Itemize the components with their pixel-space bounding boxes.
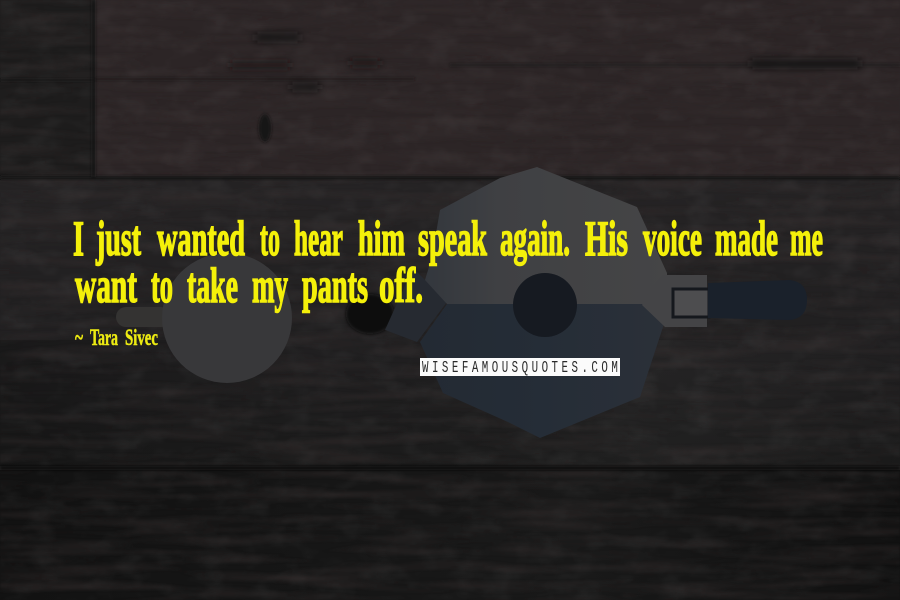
coffee mug [116,253,292,383]
author attribution [75,325,158,350]
quote text: voice [643,210,702,266]
quote text: wanted [157,210,245,266]
mug handle [116,307,171,327]
quote text: His [585,210,628,266]
author attribution: Tara [90,325,118,350]
moka pot [346,167,807,438]
pot body upper half [425,167,667,304]
watermark badge: WISEFAMOUSQUOTES.COM [422,359,618,378]
pot body lower half [420,304,667,438]
quote text: want [75,257,137,313]
quote text: him [358,210,405,266]
quote text: my [252,257,288,313]
quote text: just [95,210,141,266]
quote text: made [715,210,778,266]
pot handle bracket [642,275,707,327]
quote text: hear [294,210,343,266]
pot handle grip [673,289,709,317]
quote text: me [790,210,823,266]
quote text [73,210,823,313]
pot lid knob [513,273,577,337]
quote text: pants [302,257,368,313]
quote text: take [187,257,238,313]
quote text: off. [379,257,423,313]
pot black handle [708,280,807,320]
author attribution: ~ [75,325,83,350]
quote text: to [151,257,173,313]
quote text: I [73,210,84,266]
author attribution: Sivec [125,325,158,350]
quote text: again. [500,210,570,266]
quote text: speak [418,210,487,266]
quote text: to [260,210,280,266]
mug body [162,253,292,383]
pot spout [385,268,447,342]
